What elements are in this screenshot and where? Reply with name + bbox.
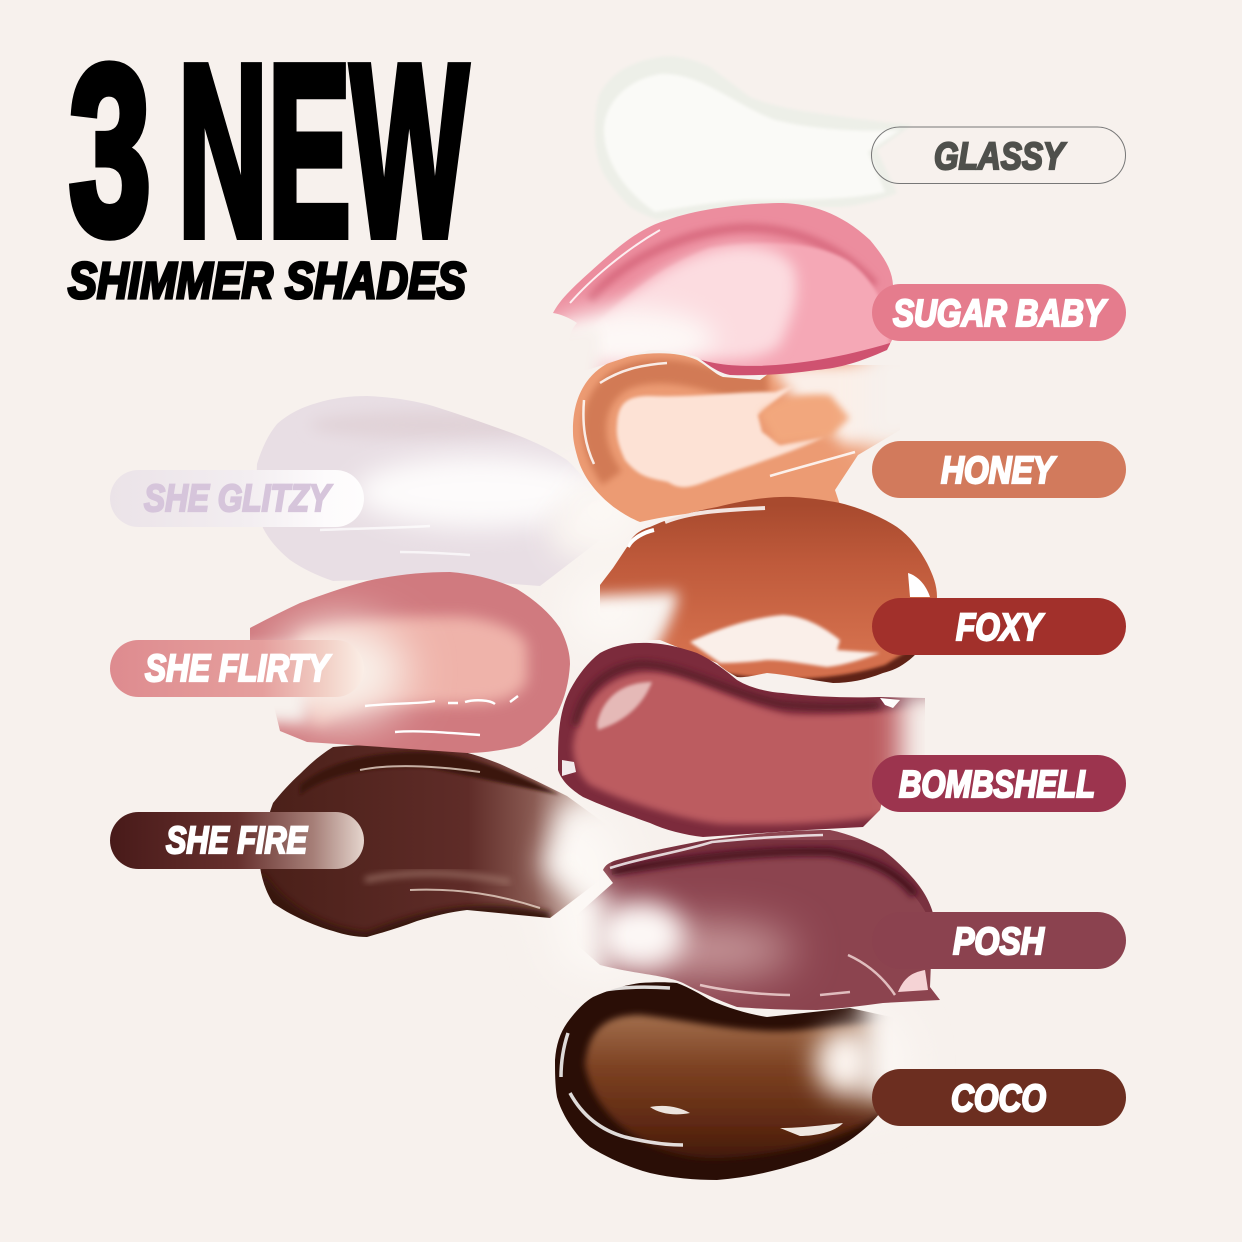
title: 3 NEW: 3 [69, 16, 151, 284]
label: sugar baby [872, 284, 1126, 341]
label: sugar baby: SUGAR BABY [893, 293, 1108, 335]
label: she fire: SHE FIRE [166, 820, 308, 862]
swatch: she fire [260, 745, 590, 937]
label: foxy: FOXY [956, 607, 1045, 649]
swatch: foxy [600, 496, 937, 683]
label: posh [872, 912, 1126, 969]
label: coco [872, 1069, 1126, 1126]
label: she fire [110, 812, 364, 869]
swatch: she glitzy [257, 396, 576, 586]
swatch: honey [572, 353, 890, 522]
label: glassy [872, 127, 1126, 184]
swatch: coco [555, 982, 884, 1180]
label: she flirty [110, 640, 364, 697]
swatch: posh [584, 830, 940, 1010]
label: honey [872, 441, 1126, 498]
label: she flirty: SHE FLIRTY [145, 648, 332, 690]
label: she glitzy: SHE GLITZY [144, 478, 333, 520]
label: she glitzy [110, 470, 364, 527]
label: bombshell [872, 755, 1126, 812]
subtitle: shimmer shades: SHIMMER SHADES [68, 252, 466, 309]
swatch: she flirty [250, 572, 570, 753]
swatch: glassy [595, 56, 912, 220]
label: bombshell: BOMBSHELL [899, 764, 1095, 806]
swatch: bombshell [558, 642, 925, 837]
title: 3 NEW [69, 14, 468, 287]
label: foxy [872, 598, 1126, 655]
label: glassy: GLASSY [934, 136, 1067, 178]
title: 3 NEW: NEW [178, 14, 468, 287]
label: coco: COCO [951, 1078, 1046, 1120]
label: honey: HONEY [941, 450, 1057, 492]
label: posh: POSH [953, 921, 1045, 963]
swatch: sugar baby [553, 203, 893, 376]
